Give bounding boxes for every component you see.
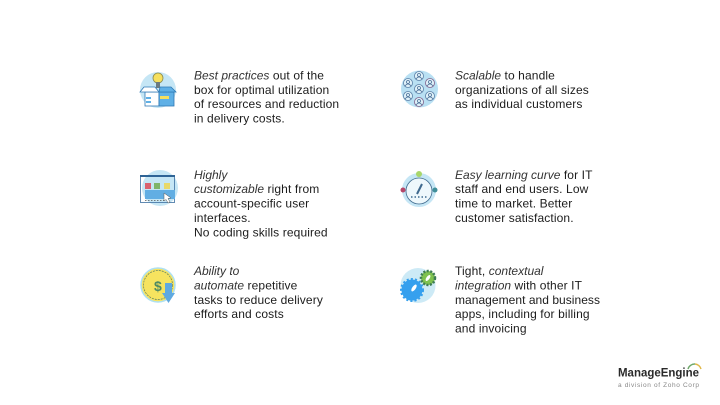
- text: highly customizable: right from: [267, 182, 319, 196]
- text: highly customizable: customizable: [194, 182, 264, 196]
- text: best practices: in delivery costs.: [194, 112, 285, 126]
- text: highly customizable: interfaces.: [194, 211, 251, 225]
- icon: scalable people network: [401, 70, 438, 108]
- text: ability to automate: efforts and costs: [194, 307, 284, 321]
- text: best practices: Best practices out of the: [194, 68, 324, 82]
- icon: open box with light bulb: [140, 72, 176, 108]
- text: highly customizable: No coding skills required: [194, 226, 328, 240]
- text: contextual integration: Tight, contextual: [455, 264, 543, 278]
- text: contextual integration: apps, including for billing: [455, 307, 590, 321]
- text: best practices: box for optimal utilization: [194, 83, 329, 97]
- text: ability to automate: repetitive: [248, 278, 297, 292]
- text: ability to automate: tasks to reduce delivery: [194, 293, 323, 307]
- text: easy learning curve: customer satisfaction.: [455, 211, 574, 225]
- text: highly customizable: Highly: [194, 168, 228, 182]
- icon: integration gears: [400, 268, 436, 303]
- text: contextual integration: and invoicing: [455, 322, 527, 336]
- text: easy learning curve: Easy learning curve for IT: [455, 168, 593, 182]
- text: scalable: organizations of all sizes: [455, 83, 589, 97]
- icon: customizable interface window: [140, 170, 178, 206]
- text: easy learning curve: staff and end users. Low: [455, 182, 589, 196]
- text: ability to automate: Ability to: [193, 264, 240, 278]
- icon: learning curve gauge: [400, 171, 438, 207]
- text: scalable: as individual customers: [455, 97, 582, 111]
- text: ability to automate: automate: [194, 278, 244, 292]
- logo: ManageEngine: ManageEngine: [618, 368, 699, 380]
- text: scalable: Scalable to handle: [455, 68, 555, 82]
- text: easy learning curve: time to market. Better: [455, 196, 572, 210]
- text: contextual integration: integration: [455, 278, 511, 292]
- text: best practices: of resources and reduction: [194, 97, 339, 111]
- text: highly customizable: account-specific user: [194, 196, 309, 210]
- logo: ManageEngine: a division of Zoho Corp: [618, 382, 699, 389]
- text: contextual integration: management and business: [455, 293, 600, 307]
- text: contextual integration: with other IT: [514, 278, 582, 292]
- icon: dollar coin with down arrow: [141, 268, 175, 303]
- icon: dollar coin with down arrow: $: [154, 278, 162, 294]
- logo: ManageEngine: [618, 364, 701, 389]
